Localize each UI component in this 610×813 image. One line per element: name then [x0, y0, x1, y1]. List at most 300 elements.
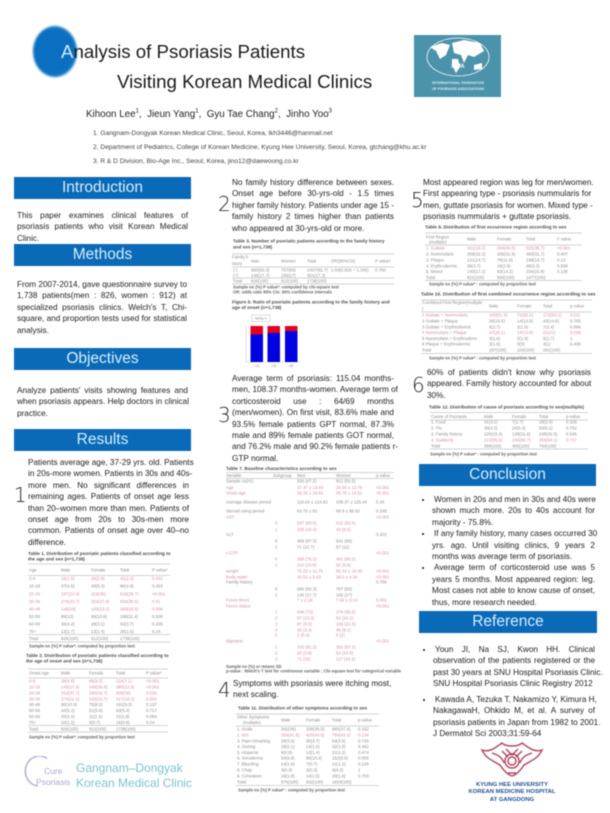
table 3: family history and sex: Women: [281, 258, 296, 264]
table 7: baseline characteristics: 546 (73): [297, 610, 314, 614]
table 12: cause of psoriasis: 405(100): [512, 444, 530, 448]
table 1: age and sex: 60-69: [29, 622, 41, 626]
text: result 1: Patients average age, 37-29 yrs. old. Patients: [28, 458, 194, 467]
hospital name: KYUNG HEE UNIVERSITY: [476, 782, 548, 788]
text: conclusion bullets: If any family history, many cases occurred 30: [434, 529, 597, 538]
table 12: cause of psoriasis: 764(100): [539, 444, 557, 448]
table 10: combined occurrence region: 172(53.1): [543, 312, 562, 318]
title circle accent: [33, 26, 77, 77]
table 1: age and sex: 13(1.4): [91, 629, 105, 634]
heading: Results: [14, 429, 191, 451]
table 2: onset age and sex: 75(8.2): [89, 702, 103, 707]
table 1: age and sex: 49(5.4): [91, 584, 105, 588]
table 11: other symptoms: Table 11. Distribution of other symptoms according to sex: [238, 706, 367, 710]
table 1: age and sex: 826(100): [61, 636, 79, 641]
table 12: cause of psoriasis: [429, 404, 588, 456]
text: result 3: and 76.2% male and 90.2% female patients r-: [232, 442, 398, 451]
table 11: other symptoms: 29(3.5): [281, 738, 295, 744]
table 2: onset age and sex: 70+: [29, 720, 37, 725]
text: objectives: Analyze patients' visits showing features and: [17, 386, 188, 395]
table 11: other symptoms: 14(1.5): [306, 744, 320, 749]
table 3: family history and sex: 1437(82.7): [307, 268, 328, 272]
table 2: onset age and sex: 143(15.7): [89, 696, 108, 702]
text: result 1: common. Patients of onset age over 40–no: [28, 526, 189, 535]
text: references: J Dermatol Sci 2003;31:59-64: [433, 729, 541, 738]
table 1: age and sex: 0.506: [152, 614, 163, 619]
hospital name: KOREAN MEDICINE HOSPITAL: [469, 789, 555, 795]
table 7: baseline characteristics: [226, 466, 402, 674]
table 9: first occurrence region: <0.001: [557, 246, 571, 250]
table 7: baseline characteristics: 0.756: [376, 580, 387, 584]
table 10: combined occurrence region: 0.011: [570, 312, 581, 318]
table 12: cause of psoriasis: 2. Flu: [431, 426, 442, 430]
table 2: onset age and sex: Sample no (%) P value*: computed by proportion test: [29, 734, 135, 740]
table 11: other symptoms: 7(0.7): [306, 762, 318, 766]
table 9: first occurrence region: (multiple): [429, 240, 447, 244]
table 1: age and sex: 36(4.4): [61, 622, 75, 626]
table 1: age and sex: 28(3.1): [91, 622, 105, 626]
table 10: combined occurrence region: 3 Guttate + Erythrodermic: [422, 324, 472, 330]
table 7: baseline characteristics: 0: [275, 556, 278, 562]
clinic logo: Cure Psoriasis / Gangnam-Dongyak: Psoriasis: [36, 777, 70, 787]
table 2: onset age and sex: Total: [116, 670, 125, 676]
IFPA logo: [413, 34, 502, 98]
table 10: combined occurrence region: 291(100): [543, 348, 561, 352]
table 11: other symptoms: 18(2.1): [281, 744, 295, 749]
table 7: baseline characteristics: 358 (76.2): [297, 556, 317, 562]
table 2: onset age and sex: 826(100): [61, 726, 79, 732]
table 9: first occurrence region: Female: [497, 236, 512, 242]
table 7: baseline characteristics: 0.401: [376, 532, 387, 537]
table 10: combined occurrence region: 7(2.4): [543, 324, 555, 330]
text: objectives: [16, 386, 190, 418]
text: result 3: corticosteroid use : 64/69 months: [232, 397, 394, 406]
text: result 4: Symptoms with psoriasis were itching most,: [233, 679, 391, 688]
table 11: other symptoms: 7. Bleeding: [237, 762, 259, 766]
table 7: baseline characteristics: 615 (93.5): [336, 520, 356, 526]
table 11: other symptoms: p-value: [358, 718, 373, 722]
table 1: age and sex: 26(1.5): [120, 629, 134, 634]
table 1: age and sex: 0-9: [29, 576, 36, 581]
text: result 3: (men/women). On first visit, 83.6% male and: [232, 408, 394, 417]
table 2: onset age and sex: Female: [89, 670, 104, 676]
table 7: baseline characteristics: 3: [275, 622, 278, 626]
table 2: onset age and sex: 10(1.2): [61, 720, 75, 725]
text: references: past 30 years at SNU Hospital Psoriasis Clinic.: [433, 668, 603, 677]
table 2: onset age and sex: <0.001: [146, 684, 160, 690]
table 7: baseline characteristics: 0.26: [376, 500, 385, 504]
table 1: age and sex: 120(13.2): [91, 606, 110, 612]
table 7: baseline characteristics: 54 (10.6): [336, 650, 354, 656]
table 9: first occurrence region: 49(3.3): [526, 264, 540, 268]
table 7: baseline characteristics: 155 (17): [336, 592, 353, 598]
table 10: combined occurrence region: Sample no (%) P value* : computed by proportion test: [429, 356, 537, 360]
table 10: combined occurrence region: 5(1.7): [543, 336, 555, 341]
table 2: onset age and sex: 0.717: [146, 708, 157, 713]
result number 6: 6: [412, 373, 425, 397]
table 1: age and sex: 64(3.7): [120, 622, 134, 626]
table 7: baseline characteristics: 279 (55.5): [336, 610, 356, 614]
table 12: cause of psoriasis: Cause of Psoriasis: [431, 414, 467, 419]
table 7: baseline characteristics: 1: [275, 562, 278, 568]
clinic logo: Cure Psoriasis / Gangnam-Dongyak: Cure: [44, 766, 62, 776]
table 2: onset age and sex: 85(9.3): [89, 678, 103, 684]
table 11: other symptoms: 1: [358, 768, 361, 772]
table 12: cause of psoriasis: 7(1.7): [512, 420, 524, 424]
text: result 3: men, 108.37 months-women. Average term of: [232, 385, 398, 394]
table 11: other symptoms: 5. Alopecia: [237, 750, 259, 755]
table 11: other symptoms: 64(3.5): [332, 738, 346, 744]
affiliations: 1. Gangnam-Dongyak Korean Medical Clinic, Seoul, Korea, lkh3446@hanmail.net: [93, 130, 332, 137]
table 7: baseline characteristics: 52 (9.8): [336, 562, 351, 568]
table 9: first occurrence region: 460(31.7): [526, 252, 545, 256]
table 9: first occurrence region: 656(100): [497, 275, 515, 280]
table 3: family history and sex: Sample no (%) P value*: computed by chi-square test: [233, 284, 339, 290]
table 9: first occurrence region: First Region: [426, 234, 450, 240]
table 7: baseline characteristics: Women: [336, 473, 351, 478]
table 7: baseline characteristics: 680 (82.3): [297, 586, 317, 592]
table 7: baseline characteristics: 63.75 ± 92: [297, 508, 318, 514]
table 7: baseline characteristics: 1: [275, 527, 278, 532]
table 1: age and sex: 70+: [29, 629, 37, 634]
table 7: baseline characteristics: <0.001: [376, 574, 390, 580]
table 2: onset age and sex: 6(0.7): [89, 720, 101, 725]
table 7: baseline characteristics: p-value: [376, 473, 391, 478]
table 1: age and sex: 254(27.9): [91, 599, 110, 604]
text: references: SNU Hospital Psoriasis Clinic Registry 2012: [433, 679, 593, 688]
table 1: age and sex: 198(11.4): [120, 614, 139, 619]
table 1: age and sex: 99(10.9): [91, 614, 108, 619]
table 9: first occurrence region: F value: [557, 236, 572, 242]
text: result 3: GTP normal.: [232, 454, 278, 463]
hospital name: [468, 781, 556, 803]
table 3: family history and sex: 757(83): [281, 268, 296, 272]
table 9: first occurrence region: 821(100): [467, 275, 485, 280]
table 3: family history and sex: 680(82.3): [251, 268, 270, 272]
text: result 3: [232, 374, 398, 463]
table 11: other symptoms: 21(1.2): [332, 750, 346, 755]
table 1: age and sex: 0.24: [152, 629, 161, 634]
table 11: other symptoms: 0.129: [358, 762, 369, 766]
table 7: baseline characteristics: <0.001: [376, 568, 390, 574]
table 2: onset age and sex: 912(100): [89, 726, 107, 732]
table 1: age and sex: Sample no (%) P value*: computed by proportion test: [29, 644, 135, 648]
clinic logo: Cure Psoriasis / Gangnam-Dongyak: Gangnam–Dongyak: [76, 761, 183, 775]
title: [60, 41, 372, 93]
table 10: combined occurrence region: [421, 292, 596, 360]
text: result 2: No family history difference between sexes.: [232, 178, 394, 187]
table 12: cause of psoriasis: 18(2.4): [539, 420, 553, 424]
table 7: baseline characteristics: Feces times: [226, 598, 249, 602]
table 7: baseline characteristics: digestion: [226, 638, 244, 644]
table 11: other symptoms: Other Symptoms: [237, 714, 269, 720]
table 12: cause of psoriasis: 0.747: [566, 438, 577, 442]
heading: Reference: Reference: [472, 613, 544, 630]
table 9: first occurrence region: 5. Mixed: [426, 269, 443, 274]
table 10: combined occurrence region: 6 Plaque + Erythrodermic: [422, 342, 471, 346]
table 12: cause of psoriasis: 1. Food: [431, 420, 446, 424]
table 2: onset age and sex: 0.034: [146, 690, 157, 696]
table 2: onset age and sex: 290(32.7): [89, 690, 108, 696]
table 2: onset age and sex: <0.001: [146, 678, 160, 684]
text: result 5: First appearing type - psoriasis nummularis for: [423, 189, 591, 198]
text: result 1: than 20–women more than men. Patients of: [28, 504, 189, 513]
table 7: baseline characteristics: 0: [275, 586, 278, 592]
table 7: baseline characteristics: 69.9 ± 98.92: [336, 508, 360, 514]
table 11: other symptoms: 8. Chap: [237, 768, 253, 772]
table 11: other symptoms: 354(41.5): [281, 732, 300, 738]
table 11: other symptoms: 680(37.4): [332, 726, 351, 732]
table 11: other symptoms: 6. Xeroderma: [237, 756, 264, 760]
text: introduction: Clinic.: [17, 234, 39, 243]
table 12: cause of psoriasis: 359(100): [484, 444, 502, 448]
table 7: baseline characteristics: 20 (3.9): [297, 650, 312, 656]
text: result 4: [232, 679, 392, 700]
text: conclusion bullets: [421, 495, 598, 607]
text: result 3: male and 89% female patients GOT normal,: [232, 431, 394, 440]
table 7: baseline characteristics: Variable: [226, 473, 242, 478]
table 7: baseline characteristics: 0: [275, 520, 278, 526]
table 7: baseline characteristics: Age: [226, 485, 234, 490]
table 9: first occurrence region: 1477(100): [526, 275, 546, 280]
table 2: onset age and sex: Onset Age: [29, 670, 50, 676]
table 7: baseline characteristics: 105 (16.4): [297, 527, 317, 532]
text: methods: [16, 280, 188, 336]
table 7: baseline characteristics: <0.001: [376, 485, 390, 490]
table 2: onset age and sex: 0.04: [146, 720, 155, 725]
table 1: age and sex: 30-39: [29, 599, 41, 604]
table 7: baseline characteristics: 72.23 ± 11.76: [297, 568, 324, 574]
table 7: baseline characteristics: Average disease period: [226, 500, 272, 504]
table 12: cause of psoriasis: 0.646: [566, 432, 577, 436]
text: result 1: remaining ages. Patients of onset age less: [28, 492, 189, 501]
text: result 5: Most appeared region was leg for men/women.: [423, 178, 594, 187]
table 11: other symptoms: 3(0.3): [306, 768, 318, 772]
table 2: onset age and sex: 40-49: [29, 702, 41, 707]
table 2: onset age and sex: 174(21.1): [61, 696, 80, 702]
result number 2: 2: [218, 192, 231, 216]
table 9: first occurrence region: Total: [526, 236, 535, 242]
table 9: first occurrence region: [425, 224, 582, 286]
table 9: first occurrence region: 4. Erythrodermic: [426, 264, 458, 268]
table 7: baseline characteristics: 46 (9.1): [336, 628, 351, 632]
table 7: baseline characteristics: Onset age: [226, 490, 246, 496]
table 11: other symptoms: 794(43.1): [332, 732, 351, 738]
text: references: Kawada A, Tezuka T, Nakamizo Y, Kimura H,: [435, 695, 597, 704]
table 12: cause of psoriasis: p-value: [566, 414, 581, 419]
text: result 3: 93.5% female patients GPT normal, 87.3%: [232, 420, 394, 429]
text: introduction: psoriasis patients who visit Korean Medical: [17, 222, 188, 231]
table 7: baseline characteristics: 1: [275, 610, 278, 614]
table 11: other symptoms: 1. Scale: [237, 726, 253, 732]
table 3: family history and sex: 912(100): [281, 278, 299, 284]
figure 5: family history stacked bar chart: [232, 300, 390, 368]
table 1: age and sex: Table 1. Distribution of psoriatic patients classified according to: [28, 551, 171, 556]
table 2: onset age and sex: Table 2. Distribution of psoriatic patients classified according to: [26, 653, 169, 658]
table 7: baseline characteristics: p-value : Welch's T test for continuous variable ; Chi-square test for categorical variable: [226, 668, 402, 674]
text: conclusion bullets: Most cases not able to know cause of onset,: [432, 586, 595, 595]
table 3: family history and sex: 301(17.3): [307, 273, 326, 278]
text: methods: 1,738 patients(men : 826, women : 912) at: [17, 291, 187, 300]
table 11: other symptoms: 9. Coloration: [237, 774, 262, 778]
table 7: baseline characteristics: 55.44 ± 10.40: [336, 568, 363, 574]
table 1: age and sex: 13(1.7): [61, 629, 75, 634]
table 11: other symptoms: 942(100): [306, 780, 324, 784]
table 1: age and sex: 41(2.4): [120, 576, 134, 581]
title: Visiting Korean Medical Clinics: [117, 71, 372, 92]
table 7: baseline characteristics: 2: [275, 650, 278, 656]
table 1: age and sex: 197(23.9): [61, 592, 80, 596]
table 1: age and sex: 26(2.9): [91, 576, 105, 581]
table 7: baseline characteristics: 1: [275, 644, 278, 650]
table 9: first occurrence region: 205(31.5): [497, 252, 516, 256]
table 10: combined occurrence region: 2(1.9): [517, 336, 529, 341]
table 7: baseline characteristics: 1: [275, 544, 278, 550]
text: result 4: next scaling.: [233, 690, 279, 699]
result number 1: 1: [14, 483, 27, 507]
table 7: baseline characteristics: 112 (23.8): [297, 562, 317, 568]
table 1: age and sex: 1738(100): [120, 636, 140, 641]
table 11: other symptoms: 338(35.5): [306, 726, 325, 732]
table 9: first occurrence region: Sample no (%) P value* : computed by proportion test: [429, 282, 537, 286]
table 1: age and sex: Total: [120, 568, 129, 572]
table 2: onset age and sex: 42(5.1): [61, 708, 75, 713]
table 1: age and sex: 15(1.5): [61, 576, 75, 581]
text: result 6: appeared. Family history accounted for about: [427, 379, 591, 388]
heading: Introduction: Introduction: [62, 179, 143, 196]
text: references: observation of the patients registered or the: [433, 656, 595, 665]
table 7: baseline characteristics: 57 (13.3): [297, 616, 315, 620]
table 9: first occurrence region: 525(35.7): [526, 246, 545, 250]
text: result 2: who appeared at 30-yrs-old or more.: [232, 224, 364, 233]
table 9: first occurrence region: 19(2.9): [497, 264, 511, 268]
table 7: baseline characteristics: 481 (90.2): [336, 556, 356, 562]
table 7: baseline characteristics: 5 (1): [336, 632, 345, 638]
table 12: cause of psoriasis: 213(55.5): [484, 438, 503, 442]
table 11: other symptoms: 0.462: [358, 744, 369, 749]
text: conclusion bullets: years 5 months. Most appeared region: leg.: [432, 575, 595, 584]
clinic logo: Cure Psoriasis / Gangnam-Dongyak: Korean Medical Clinic: [76, 776, 192, 790]
table 11: other symptoms: Female: [306, 718, 321, 722]
table 7: baseline characteristics: <0.001: [376, 550, 390, 556]
table 12: cause of psoriasis: Total: [431, 444, 440, 448]
text: methods: From 2007-2014, gave questionnaire survey to: [17, 280, 187, 289]
table 10: combined occurrence region: Total: [422, 348, 431, 352]
table 9: first occurrence region: 0.13: [557, 258, 566, 262]
table 10: combined occurrence region: 0.999: [570, 324, 581, 330]
table 2: onset age and sex: 124(7.1): [116, 678, 133, 684]
text: result 5: psoriasis nummularis + guttate psoriasis.: [423, 212, 571, 221]
table 3: family history and sex: (+): [233, 273, 239, 278]
table 11: other symptoms: 2. Itch: [237, 732, 249, 738]
table 12: cause of psoriasis: 31(3.1): [484, 420, 498, 424]
table 11: other symptoms: [236, 706, 379, 792]
table 3: family history and sex: istory: [232, 261, 243, 266]
table 9: first occurrence region: 78(11.9): [497, 258, 513, 262]
table 12: cause of psoriasis: Female: [512, 414, 527, 419]
table 10: combined occurrence region: Table 10. Distribution of first combined occurrence region according to sex: [421, 292, 596, 298]
table 12: cause of psoriasis: 0.329: [566, 420, 577, 424]
table 2: onset age and sex: [26, 653, 169, 740]
table 7: baseline characteristics: 5: [275, 632, 278, 638]
table 7: baseline characteristics: 7 ± 2.18: [297, 598, 313, 602]
text: conclusion bullets: shown much more. 20s to 40s account for: [432, 506, 595, 515]
table 11: other symptoms: 876(100): [281, 780, 299, 784]
table 1: age and sex: 86(4.9): [120, 584, 134, 588]
table 11: other symptoms: 3. Pain+Smarting: [237, 738, 271, 744]
table 10: combined occurrence region: 61(21): [543, 330, 556, 335]
table 12: cause of psoriasis: Table 12. Distribution of cause of psoriasis according to sex(multiple): [429, 404, 584, 410]
table 7: baseline characteristics: 71 (12.7): [297, 544, 315, 550]
text: references: [422, 645, 603, 738]
table 12: cause of psoriasis: 35(4.2): [484, 426, 498, 430]
table 7: baseline characteristics: 757 (83): [336, 586, 353, 592]
result number 3: 3: [218, 403, 231, 427]
table 2: onset age and sex: 0.084: [146, 714, 157, 719]
table 11: other symptoms: 4. Oozing: [237, 744, 256, 749]
table 11: other symptoms: 152(8.5): [332, 756, 349, 760]
table 7: baseline characteristics: 67 (11): [336, 544, 350, 550]
table 11: other symptoms: 21(1.2): [332, 762, 346, 766]
table 11: other symptoms: 35(3.7): [306, 738, 320, 744]
table 12: cause of psoriasis: 246(60.7): [512, 438, 531, 442]
table 1: age and sex: 0.205: [152, 622, 163, 626]
table 7: baseline characteristics: 0: [275, 538, 278, 544]
table 10: combined occurrence region: 100(51.5): [489, 312, 508, 318]
text: result 2: Onset age before 30-yrs-old - 1.5 times: [232, 189, 394, 198]
table 3: family history and sex: 146(17.7): [251, 273, 270, 278]
table 2: onset age and sex: 51(5.6): [89, 708, 103, 713]
text: result 5: men, guttate psoriasis for women. Mixed type -: [423, 201, 593, 210]
table 7: baseline characteristics: 43 (6.5): [336, 527, 351, 532]
table 10: combined occurrence region: 5(2.7): [489, 324, 501, 330]
table 2: onset age and sex: 93(5.4): [116, 708, 130, 713]
table 9: first occurrence region: Table 9. Distribution of first occurrence region according to sex: [425, 224, 567, 230]
table 10: combined occurrence region: Total: [543, 304, 552, 308]
table 10: combined occurrence region: 187(100): [489, 348, 507, 352]
table 2: onset age and sex: 31(1.8): [116, 714, 130, 719]
heading: Objectives: [14, 348, 191, 370]
table 12: cause of psoriasis: 4. Suddenly: [431, 438, 455, 442]
table 2: onset age and sex: 20(2.4): [61, 714, 75, 719]
table 3: family history and sex: Table 3. Number of psoriatic patients according to the family history: [233, 238, 385, 244]
text: result 6: [426, 368, 592, 400]
table 9: first occurrence region: 140(17.2): [467, 269, 486, 274]
table 7: baseline characteristics: r-GTP: [226, 550, 238, 556]
figure 5: family history stacked bar chart: <30: [271, 364, 277, 368]
table 7: baseline characteristics: Sample no(%): [226, 478, 254, 484]
table 11: other symptoms: 14(1.5): [306, 774, 320, 778]
table 7: baseline characteristics: <0.001: [376, 604, 390, 608]
table 11: other symptoms: 14(1.6): [281, 762, 295, 766]
table 7: baseline characteristics: 2 (0.4): [297, 632, 310, 638]
table 9: first occurrence region: 0.508: [557, 264, 568, 268]
table 7: baseline characteristics: 826 (47.5): [297, 478, 317, 484]
table 9: first occurrence region: 259(32.2): [467, 252, 486, 256]
text: conclusion bullets: thus, more research needed.: [432, 598, 537, 607]
table 7: baseline characteristics: Feces status: [226, 604, 250, 608]
table 1: age and sex: <0.001: [152, 592, 166, 596]
table 7: baseline characteristics: 117 (24.2): [336, 656, 356, 662]
heading: Methods: [14, 244, 191, 266]
table 7: baseline characteristics: 331 (67.2): [336, 644, 356, 650]
table 3: family history and sex: Total: [307, 258, 316, 264]
text: methods: analysis.: [17, 326, 49, 335]
table 9: first occurrence region: 264(40.5): [497, 246, 516, 250]
table 3: family history and sex: OR(95%CIs): [331, 258, 356, 264]
table 12: cause of psoriasis: Male: [484, 414, 494, 419]
table 1: age and sex: Male: [61, 568, 71, 572]
